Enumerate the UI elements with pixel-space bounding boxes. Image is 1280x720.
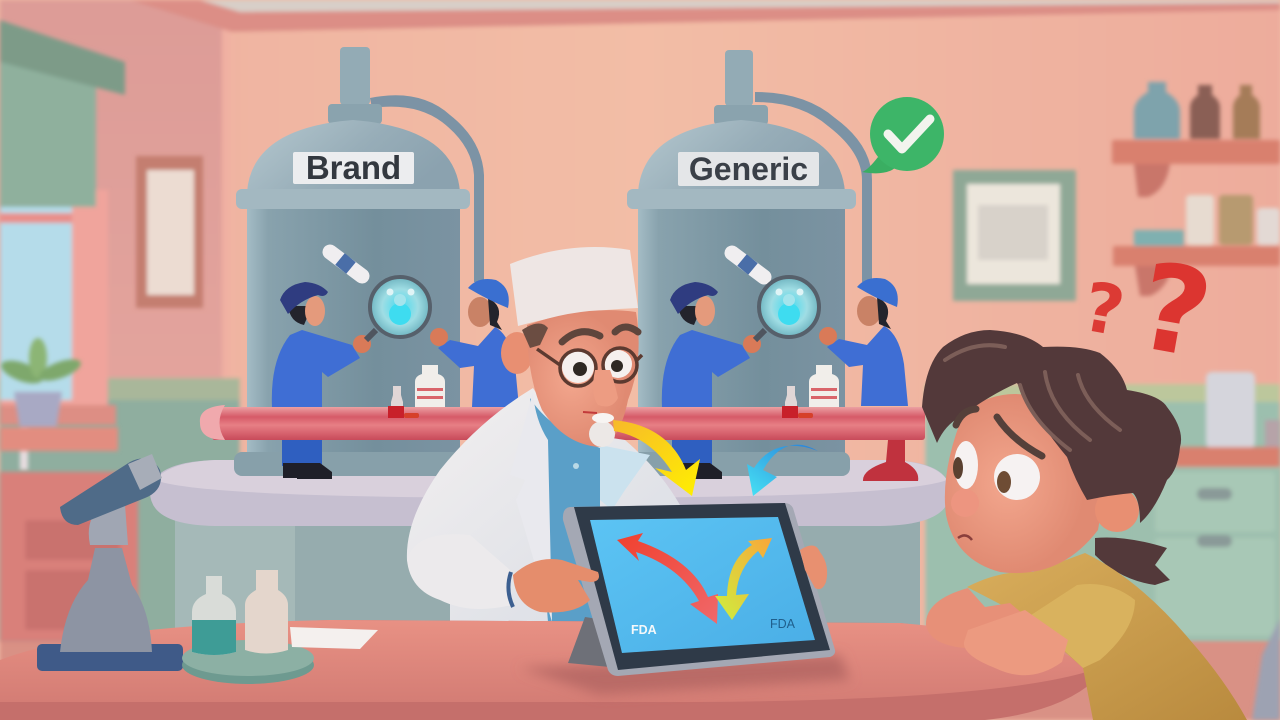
ponytail bbox=[1095, 537, 1170, 585]
circular workbench bbox=[150, 460, 950, 630]
child ear bbox=[1095, 488, 1139, 532]
nose bbox=[593, 370, 618, 406]
lab coat bbox=[407, 388, 680, 622]
tablet stand bbox=[568, 617, 620, 668]
child face bbox=[945, 394, 1101, 573]
child brows bbox=[956, 409, 1042, 456]
right cabinet and counter bbox=[1130, 372, 1280, 720]
FDA label right: FDA bbox=[770, 617, 796, 631]
plant on side desk bbox=[0, 338, 83, 470]
chin piece bbox=[589, 413, 615, 447]
tablet shadow bbox=[520, 655, 850, 695]
child eyes bbox=[953, 441, 1048, 508]
label: Brand: Brand bbox=[306, 149, 401, 186]
tablet bbox=[563, 503, 835, 676]
hat bbox=[510, 247, 638, 326]
question mark large: ? bbox=[1128, 237, 1221, 386]
hand on tablet left bbox=[508, 559, 599, 612]
window with green blind bbox=[0, 20, 125, 425]
pharmacist bbox=[407, 247, 680, 622]
check mark speech bubble bbox=[862, 97, 944, 173]
capsule: generic bbox=[732, 253, 764, 277]
worker left: generic bbox=[662, 282, 761, 479]
child mouth bbox=[958, 535, 972, 540]
face bbox=[527, 310, 639, 447]
child nose bbox=[951, 489, 979, 517]
left wall picture frame bbox=[136, 156, 203, 308]
hand on tablet right bbox=[800, 545, 827, 589]
child hair bbox=[922, 330, 1181, 523]
left desk and cabinet bbox=[0, 427, 138, 642]
sleeve bbox=[407, 534, 512, 609]
shelves with bottles bbox=[1112, 82, 1280, 296]
child arms bbox=[926, 588, 1068, 675]
question mark small: ? bbox=[1077, 268, 1130, 353]
bottle and vial: brand bbox=[388, 365, 445, 418]
eyes bbox=[562, 350, 632, 383]
tablet screen bbox=[590, 517, 815, 653]
bottle and vial: generic bbox=[782, 365, 839, 418]
magnifier: generic bbox=[755, 277, 819, 340]
ear bbox=[501, 332, 533, 374]
hair highlights bbox=[945, 345, 1120, 450]
confused child bbox=[922, 330, 1247, 720]
glasses bbox=[537, 348, 642, 386]
capsule: brand bbox=[330, 252, 362, 276]
worker right: brand bbox=[430, 279, 519, 407]
notebook bbox=[290, 627, 378, 649]
mouth bbox=[583, 412, 597, 413]
FDA label left: FDA bbox=[631, 623, 657, 637]
worker right: generic bbox=[819, 278, 908, 406]
medicine bottles on tray bbox=[182, 570, 314, 684]
microscope bbox=[37, 454, 183, 671]
wall certificate frame bbox=[953, 170, 1076, 301]
red double arrow bbox=[617, 533, 718, 624]
child sleeve bbox=[1028, 584, 1135, 668]
child shirt bbox=[967, 553, 1247, 720]
coat lapels bbox=[510, 392, 650, 622]
yellow arrow bbox=[613, 420, 700, 496]
worker left: brand bbox=[272, 282, 371, 479]
yellow double arrow bbox=[715, 538, 772, 620]
foreground table bbox=[0, 620, 1095, 720]
label: Generic: Generic bbox=[689, 151, 808, 187]
tank: generic bbox=[625, 50, 872, 476]
blue arrow bbox=[747, 445, 818, 496]
conveyor pipe bbox=[200, 405, 925, 481]
shirt button bbox=[573, 463, 579, 469]
tank: brand bbox=[234, 47, 484, 476]
magnifier: brand bbox=[366, 277, 430, 340]
shirt bbox=[530, 398, 600, 622]
brows bbox=[562, 327, 638, 342]
